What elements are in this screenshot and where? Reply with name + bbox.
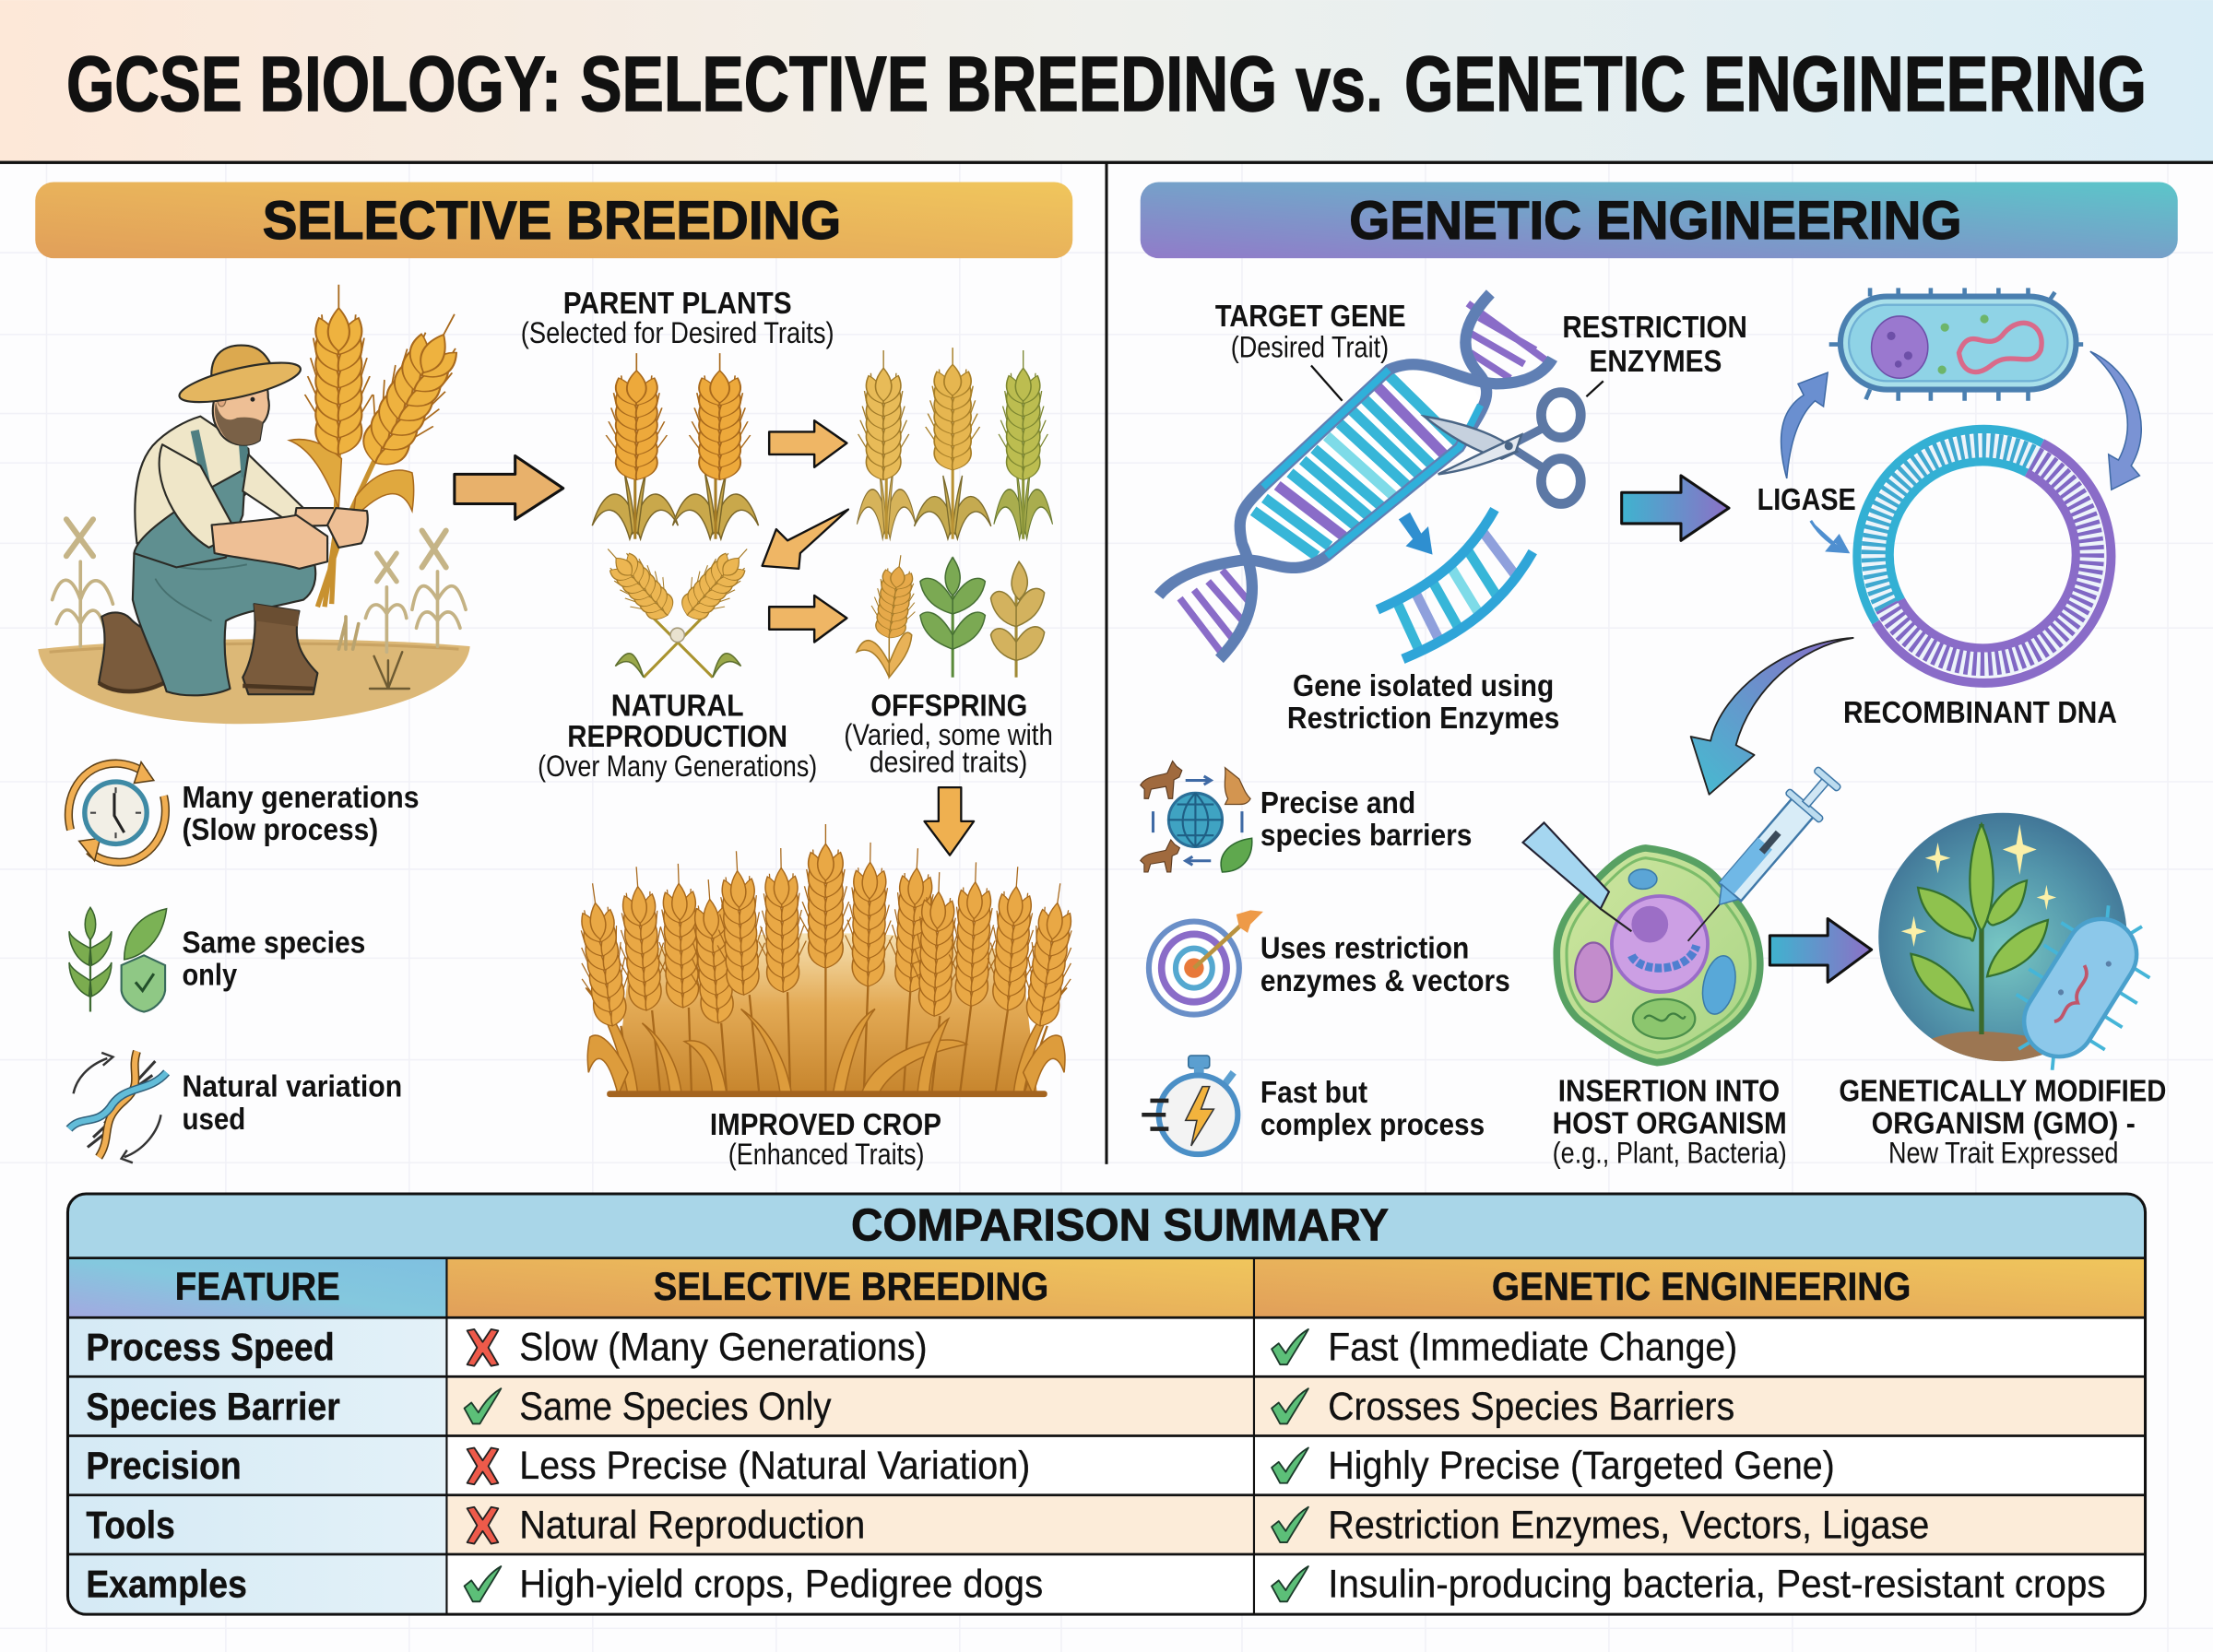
illustration: genetically modified organism: [1878, 813, 2150, 1070]
row: species barrier: Same Species Only: [519, 1385, 832, 1429]
icon: globe and animals: [1141, 761, 1252, 872]
feature: many generations: Many generations: [182, 781, 420, 815]
arm far: [243, 454, 303, 525]
label: offspring: [844, 689, 1053, 778]
label: parent plants: (Selected for Desired Traits): [521, 316, 834, 349]
illustration: plant cell with injection: [1523, 761, 1847, 1063]
row: precision: [86, 1444, 1835, 1488]
feature: fast but complex: complex process: [1260, 1108, 1485, 1142]
genetic engineering banner: [1141, 183, 2178, 258]
pipette: [1523, 822, 1609, 909]
label: recombinant DNA: RECOMBINANT DNA: [1843, 696, 2117, 730]
illustration: bacterium: [1829, 288, 2083, 401]
illustration: DNA double helix: [1159, 293, 1553, 659]
row: process speed: Process Speed: [86, 1327, 335, 1369]
natural reproduction crossed plants: [591, 535, 763, 678]
row: precision: Precision: [86, 1445, 242, 1487]
row: tools: Tools: [86, 1504, 175, 1546]
label: natural reproduction: [538, 689, 817, 783]
overall bib: [134, 468, 245, 567]
feature: many generations: [68, 762, 420, 862]
arrow: to isolated fragment: [1399, 513, 1433, 555]
feature: restriction enzymes and vectors: enzymes & vectors: [1260, 964, 1510, 998]
feature: many generations: (Slow process): [182, 813, 378, 847]
feature: fast but complex: [1142, 1056, 1485, 1154]
row: examples: Examples: [86, 1564, 247, 1606]
feature: same species only: [69, 907, 365, 1012]
icon: clock with cycle arrows: [68, 762, 165, 862]
arrow: plasmid to host: [1691, 638, 1853, 795]
hat: [211, 346, 275, 381]
centre divider: [1105, 162, 1108, 1164]
label: genetically modified organism: New Trait Expressed: [1888, 1136, 2118, 1169]
row: process speed: Fast (Immediate Change): [1328, 1326, 1737, 1370]
table header row: SELECTIVE BREEDING: [654, 1265, 1048, 1309]
label: offspring: OFFSPRING: [870, 689, 1027, 723]
row: examples: Insulin-producing bacteria, Pest-resistant crops: [1328, 1563, 2106, 1607]
icon: scissors: [1424, 393, 1580, 504]
row: tools: Natural Reproduction: [519, 1503, 865, 1547]
ground: [38, 639, 470, 724]
feature: same species only: only: [182, 959, 237, 993]
table title: COMPARISON SUMMARY: [851, 1200, 1389, 1250]
label: insertion into host organism: (e.g., Plant, Bacteria): [1553, 1136, 1787, 1169]
title band: [0, 0, 2213, 164]
table header row: [175, 1265, 1911, 1309]
arrow: helix to ligase: [1622, 476, 1729, 540]
row: species barrier: Crosses Species Barriers: [1328, 1385, 1734, 1429]
shirt torso: [135, 417, 251, 543]
head: [213, 364, 269, 445]
arrow: offspring to improved crop: [925, 787, 974, 856]
arrow: bacterium to plasmid: [2090, 351, 2141, 490]
table header row: GENETIC ENGINEERING: [1492, 1265, 1911, 1309]
label: improved crop: IMPROVED CROP: [710, 1108, 941, 1142]
icon: target with arrow: [1149, 910, 1263, 1015]
row: tools: [86, 1503, 1929, 1547]
label: gene isolated: Gene isolated using: [1293, 669, 1554, 703]
row: process speed: Slow (Many Generations): [519, 1326, 928, 1370]
label: target gene: [1215, 300, 1405, 401]
arm near: [160, 444, 237, 548]
arrow: farmer to parents: [455, 455, 563, 519]
illustration: improved crop: [569, 824, 1083, 1097]
selective breeding banner: [35, 183, 1072, 258]
arrow: parents to offspring: [769, 420, 846, 467]
label: gene isolated: Restriction Enzymes: [1287, 702, 1559, 736]
feature: natural variation used: used: [182, 1103, 245, 1137]
feature: natural variation used: Natural variation: [182, 1070, 402, 1104]
label: improved crop: [710, 1108, 941, 1171]
row: species barrier: Species Barrier: [86, 1386, 340, 1428]
feature: restriction enzymes and vectors: [1149, 910, 1510, 1015]
offspring top row: [857, 348, 1053, 539]
helix ladder interior: [1240, 366, 1481, 567]
back boot: [99, 612, 167, 691]
table cell fills: [67, 1194, 2146, 1614]
upper and lower helix tails: [1180, 303, 1545, 657]
arrow: offspring back to reproduction: [763, 510, 848, 569]
illustration: farmer holding wheat: [38, 285, 484, 724]
label: genetically modified organism: [1839, 1074, 2166, 1169]
label: natural reproduction: REPRODUCTION: [567, 720, 787, 754]
arrow: ligase to plasmid: [1811, 521, 1848, 552]
overalls legs: [133, 553, 315, 695]
label: restriction enzymes: ENZYMES: [1589, 345, 1722, 379]
label: natural reproduction: (Over Many Generations): [538, 749, 817, 783]
label: ligase: LIGASE: [1757, 483, 1856, 517]
feature: species barriers: species barriers: [1260, 819, 1472, 853]
label: offspring: desired traits): [870, 745, 1027, 778]
front boot: [243, 604, 317, 694]
icon: stopwatch with lightning: [1142, 1056, 1237, 1154]
isolated gene fragment: [1378, 510, 1533, 659]
title: SELECTIVE BREEDING: [580, 41, 1277, 127]
feature: natural variation used: [69, 1051, 402, 1162]
panel: selective breeding: [35, 183, 1083, 1171]
label: insertion into host organism: [1553, 1074, 1787, 1169]
GMO bacterium: [1990, 888, 2173, 1090]
label: restriction enzymes: RESTRICTION: [1562, 311, 1747, 345]
stalks in hand: [317, 452, 374, 607]
row: examples: [86, 1563, 2106, 1607]
icon: DNA with arrows: [69, 1051, 167, 1162]
label: parent plants: PARENT PLANTS: [563, 287, 792, 321]
panel: genetic engineering: [1141, 183, 2178, 1169]
table header row: FEATURE: [175, 1265, 340, 1309]
row: examples: High-yield crops, Pedigree dogs: [519, 1563, 1043, 1607]
genetic engineering banner: GENETIC ENGINEERING: [1349, 191, 1962, 251]
arrow: reproduction to offspring: [769, 596, 846, 643]
label: genetically modified organism: ORGANISM (GMO) -: [1872, 1106, 2136, 1140]
feature: same species only: Same species: [182, 926, 365, 961]
label: restriction enzymes: [1562, 311, 1747, 396]
title: vs.: [1296, 41, 1383, 127]
label: improved crop: (Enhanced Traits): [728, 1138, 925, 1171]
arrow: cell to GMO: [1769, 919, 1872, 982]
label: target gene: TARGET GENE: [1215, 300, 1405, 334]
feature: restriction enzymes and vectors: Uses restriction: [1260, 932, 1469, 966]
comparison summary table: [67, 1194, 2146, 1614]
parent plants: [592, 353, 759, 539]
selective breeding banner: SELECTIVE BREEDING: [263, 191, 841, 251]
syringe: [1671, 761, 1847, 956]
feature: species barriers: [1141, 761, 1472, 872]
label: offspring: (Varied, some with: [844, 718, 1053, 751]
icon: plant and shield: [69, 907, 167, 1012]
label: genetically modified organism: GENETICALLY MODIFIED: [1839, 1074, 2166, 1108]
strands: [1159, 293, 1490, 596]
row: precision: Less Precise (Natural Variation): [519, 1444, 1030, 1488]
feature: species barriers: Precise and: [1260, 786, 1415, 820]
held ears: [305, 285, 373, 454]
label: gene isolated: [1287, 669, 1559, 736]
row: precision: Highly Precise (Targeted Gene): [1328, 1444, 1835, 1488]
row: tools: Restriction Enzymes, Vectors, Ligase: [1328, 1503, 1929, 1547]
offspring bottom row: [857, 552, 1045, 678]
weak sprouts with crosses: [53, 519, 466, 689]
label: target gene: (Desired Trait): [1231, 330, 1389, 363]
title: GCSE BIOLOGY:: [66, 41, 562, 127]
label: insertion into host organism: HOST ORGANISM: [1553, 1106, 1787, 1140]
arrow: ligase to bacterium: [1781, 372, 1828, 478]
label: parent plants: [521, 287, 834, 349]
feature: fast but complex: Fast but: [1260, 1076, 1367, 1110]
illustration: recombinant DNA plasmid ring: [1857, 429, 2111, 683]
row: process speed: [86, 1326, 1737, 1370]
label: natural reproduction: NATURAL: [611, 689, 744, 723]
title: [66, 41, 2147, 127]
row: species barrier: [86, 1385, 1734, 1429]
label: insertion into host organism: INSERTION INTO: [1558, 1074, 1780, 1108]
